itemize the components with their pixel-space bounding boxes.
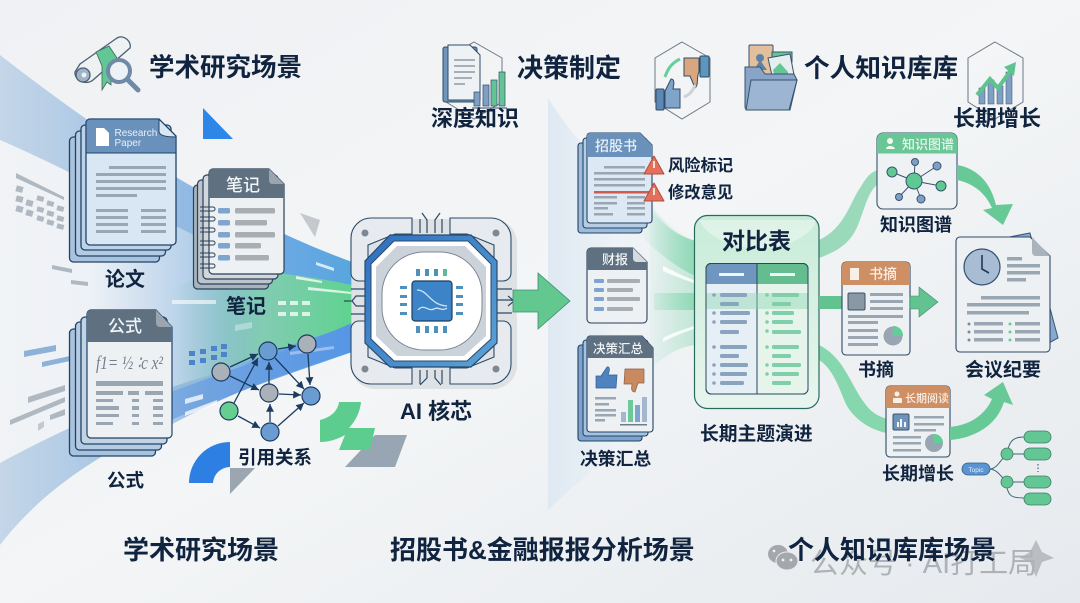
label: AI core: AI 核芯 [400,399,472,424]
label: decision summary: 决策汇总 [580,449,651,469]
table title: 对比表 [722,228,791,254]
thumb up [596,367,617,388]
bottom label: finance: 招股书&金融报报分析场景 [390,535,695,565]
title: academic research [75,37,302,90]
bottom label: academic: 学术研究场景 [123,535,279,565]
arrow: digest to minutes [910,287,938,317]
icon: warning 2 [644,183,664,201]
icon: person [886,138,895,149]
document: formula [70,310,172,456]
arrow: table to digest [819,296,842,309]
AI core chip [344,213,518,389]
icon: diploma and magnifier [75,37,138,90]
decoration: gray triangle [300,213,320,237]
right panel wedge [548,98,700,510]
formula: f1= ½ ∶c x² [96,353,163,374]
arrow: long-term to minutes [950,382,1013,440]
chip corner plates [351,218,511,384]
summary header: 决策汇总 [593,341,644,356]
topic text: Topic [968,467,984,474]
chip pins [344,213,518,385]
notes header: 笔记 [226,176,260,195]
green ribbon to knowledge graph [819,170,878,258]
arrow: chip output [513,273,570,329]
label: deep knowledge: 深度知识 [431,106,519,131]
flow ribbons to comparison table [640,200,704,370]
speed lines [10,173,88,431]
bottom label: personal: 个人知识库库场景 [788,535,996,565]
icon: folder [745,45,797,110]
label: citations: 引用关系 [238,447,312,468]
green ribbon to long-term card [819,345,887,433]
title: decision making [443,42,621,119]
label: knowledge graph: 知识图谱 [880,214,952,235]
label: meeting minutes: 会议纪要 [965,358,1041,381]
watermark text: 公众号 · AI打工局 [810,547,1037,580]
paper title: Research [114,128,157,139]
digest header: 书摘 [869,266,897,282]
prospectus header: 招股书 [595,138,637,154]
icon: page [96,128,109,146]
decoration: blue triangle [203,108,233,139]
label: long-term growth: 长期增长 [953,106,1041,131]
label: long-term growth card: 长期增长 [882,464,954,484]
card: long-term reading [886,386,950,457]
report header: 财报 [602,252,628,267]
icon: chat bubbles [768,545,798,570]
decoration: green block [320,402,375,450]
chip frame [365,235,497,367]
document: financial report [587,248,647,323]
card header: 长期阅读 [905,391,949,405]
citation network [212,335,320,441]
icon: warning 1 [644,156,664,174]
topic tree [962,431,1051,505]
icon: thumbs hexagon [655,42,710,119]
arrow: graph to minutes [957,165,1013,225]
label: digest: 书摘 [858,359,894,380]
heading: 学术研究场景 [149,54,302,82]
document: notes [194,169,284,289]
panel: comparison table [694,216,819,408]
heading: 个人知识库库 [804,54,958,83]
label: formula: 公式 [107,470,145,491]
decoration: gray parallelogram [345,435,407,467]
left data flow band [0,55,352,545]
icon: clock [964,249,1000,285]
decoration: gray corner [230,468,255,494]
formula header: 公式 [108,317,142,336]
chip shadow [351,219,517,389]
chip pads [400,269,463,333]
heading: 决策制定 [517,53,621,83]
document: meeting minutes [956,233,1058,352]
card: knowledge graph [877,133,957,209]
graph [887,158,946,203]
label: notes: 笔记 [226,295,266,318]
card header: 知识图谱 [902,137,954,152]
watermark [768,540,1054,580]
decoration: blue arc [189,442,230,483]
table [706,264,808,394]
document: research paper [70,119,176,262]
icon: star [1020,540,1054,577]
document: research paper: Paper [114,138,142,149]
document: decision summary [578,336,653,441]
icon: hexagon doc chart [443,42,507,119]
label: paper: 论文 [105,267,145,291]
chip core [412,281,452,321]
label: edit notes: 修改意见 [668,183,733,202]
white speed lines [172,262,352,416]
label: long-term theme: 长期主题演进 [700,423,813,444]
card: digest [842,262,910,355]
title: personal knowledge base [745,45,958,110]
icon: growth hexagon [968,42,1023,119]
label: risk mark: 风险标记 [668,156,733,175]
document: prospectus [578,133,652,233]
blue data ticks [189,344,227,365]
thumb down [624,369,644,392]
